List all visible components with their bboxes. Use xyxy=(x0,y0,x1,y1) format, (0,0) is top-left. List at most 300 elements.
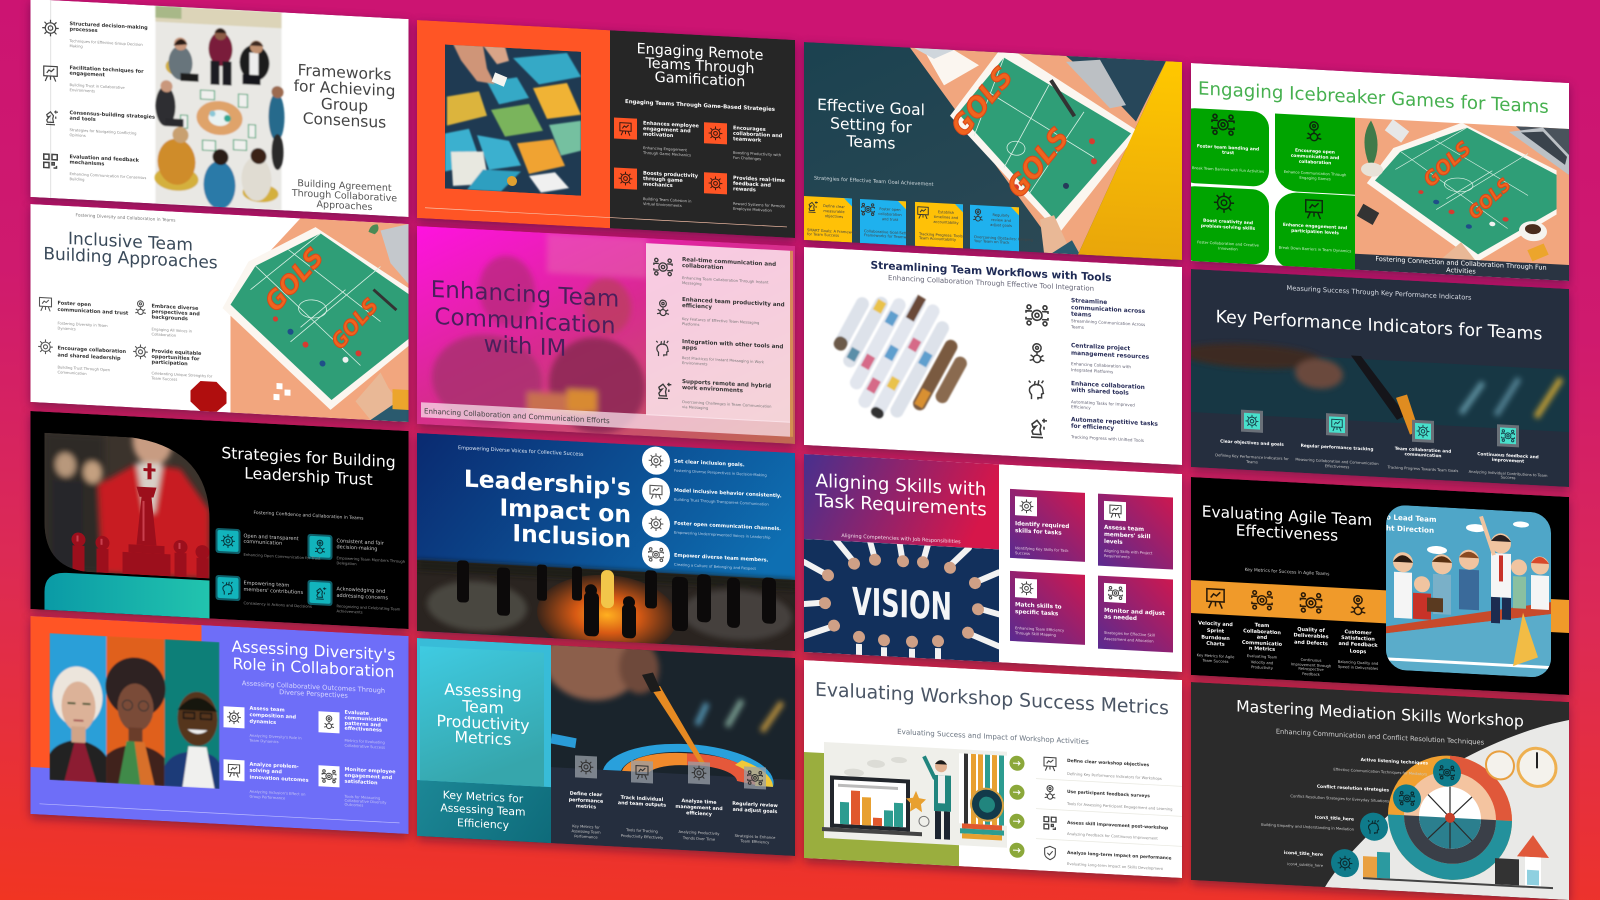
slide: Key Performance Indicators for Teams xyxy=(1181,268,1569,491)
step text: Define clear workshop objectives xyxy=(1067,758,1149,768)
tile icons xyxy=(619,121,722,191)
metric text: Balancing Quality and xyxy=(1338,660,1378,666)
panel text: Real-time communication and xyxy=(682,257,776,268)
gradient skill cards: Assess team xyxy=(1104,525,1144,533)
technique text: icon4_subtitle_here xyxy=(1287,862,1324,868)
tagline: Fostering Diversity and Collaboration in Teams xyxy=(75,212,176,224)
trust text: communication xyxy=(244,539,282,547)
metric text: Tools for Tracking xyxy=(625,828,658,834)
band icons xyxy=(1207,588,1365,616)
assessment text: Tools for Measuring xyxy=(344,795,380,801)
KPI labels xyxy=(1215,436,1548,482)
tool text xyxy=(1070,298,1158,444)
inclusion steps: Creating a Culture of Belonging and Respect xyxy=(674,563,757,571)
subtitle: Enhancing Collaboration Through Effective Tool Integration xyxy=(888,274,1094,293)
tool text: Tracking Progress with Unified Tools xyxy=(1070,434,1144,443)
metric text: Speed in Deliverables xyxy=(1338,665,1378,671)
teal corner shape xyxy=(44,572,210,618)
inclusion steps: Building Trust Through Transparent Communication xyxy=(674,498,769,507)
assessment text: communication xyxy=(344,715,388,723)
metric text: and Feedback xyxy=(1338,641,1378,649)
assessment text xyxy=(249,705,396,809)
item text: Celebrating Unique Strengths for xyxy=(152,371,213,379)
metric text: Loops xyxy=(1350,648,1366,655)
list text xyxy=(69,21,155,186)
green activity panels: Enhance Communication Through xyxy=(1284,170,1347,177)
title: Assessing xyxy=(444,679,522,703)
title: Engaging Remote xyxy=(637,41,764,64)
item text: Communication xyxy=(57,370,87,376)
list text: Structured decision-making xyxy=(70,21,148,31)
inclusion steps: Set clear inclusion goals. xyxy=(674,459,745,468)
gradient skill cards: members' skill xyxy=(1104,532,1151,540)
metric text: Retrospective xyxy=(1298,667,1324,672)
title: Inclusion xyxy=(512,519,631,553)
subtitle: Diverse Perspectives xyxy=(279,688,348,700)
subtitle: Enhancing Communication and Conflict Resolution Techniques xyxy=(1276,728,1485,747)
goals lettering: GOLS xyxy=(1419,137,1476,191)
goal cards: measurable xyxy=(823,209,845,214)
metric text: Communicatio xyxy=(1242,640,1283,648)
metric text: Key Metrics for xyxy=(572,824,600,830)
slide: Enhancing Team Communication with IM xyxy=(417,226,795,448)
slide: Evaluating Workshop Success Metrics xyxy=(804,660,1182,882)
right panel xyxy=(646,243,790,423)
inclusion steps: Fostering Diverse Perspectives in Decision-Making xyxy=(674,469,767,478)
subtitle: Aligning Competencies with Job Responsibilities xyxy=(841,533,961,545)
slide: Assessing Diversity's Role in Collaboration xyxy=(30,616,408,838)
title: Building Approaches xyxy=(43,244,218,273)
subtitle: Key Metrics for xyxy=(443,788,524,806)
trust text: Open and transparent xyxy=(244,533,299,542)
benefit text: Boosts productivity xyxy=(643,170,699,179)
item text: Embrace diverse xyxy=(152,303,199,312)
blurred meeting photo xyxy=(432,227,647,436)
goal cards: Overcoming Obstacles: Keeping xyxy=(974,235,1033,242)
assessment text: Metrics for Evaluating xyxy=(344,739,385,745)
panel text: Environments xyxy=(682,361,708,366)
green activity panels: Boost creativity and xyxy=(1203,218,1253,226)
metric text: and xyxy=(1257,634,1268,641)
trust text: Delegation xyxy=(336,561,357,566)
assessment text: Outcomes xyxy=(344,803,363,808)
metric text: Satisfaction xyxy=(1341,635,1375,643)
list text: mechanisms xyxy=(70,160,104,167)
KPI labels: communication xyxy=(1404,451,1442,459)
item text: and shared leadership xyxy=(57,352,121,362)
tool text: Automating Tasks for Improved xyxy=(1071,399,1135,408)
assessment text: solving and xyxy=(250,768,282,775)
assessment text: Assess team xyxy=(250,706,285,713)
title: Assessing Diversity's xyxy=(232,638,395,664)
subtitle: Through Collaborative xyxy=(291,188,397,204)
trust text: Recognizing and Celebrating Team xyxy=(336,604,401,612)
technique text: Building Empathy and Understanding in Mediation xyxy=(1261,823,1355,832)
item icons xyxy=(38,295,148,360)
tool text: Enhancing Collaboration with xyxy=(1071,361,1131,369)
assessment text: engagement and xyxy=(344,773,393,781)
assessment text: innovation outcomes xyxy=(250,775,309,784)
benefit text: Provides real-time xyxy=(733,175,786,184)
photo: goals field xyxy=(1355,117,1569,267)
goal cards: Frameworks for Teamwork xyxy=(864,233,913,240)
gradient skill cards: Aligning Skills with Project xyxy=(1104,549,1153,555)
panel text: Enhancing Team Collaboration Through Instant xyxy=(682,276,769,285)
metric text xyxy=(569,791,778,849)
technique text: Active listening techniques xyxy=(1361,757,1428,767)
panel icons xyxy=(654,258,672,399)
assessment text: Team Dynamics xyxy=(249,739,279,744)
panel text: Key Features of Effective Team Messaging xyxy=(682,317,759,325)
slide: Inclusive Team Building Approaches xyxy=(30,204,408,426)
tool text: communication across xyxy=(1071,305,1146,315)
tool text: Automate repetitive tasks xyxy=(1071,417,1158,428)
subtitle: Efficiency xyxy=(457,816,510,832)
KPI labels: Defining Key Performance Indicators for xyxy=(1215,453,1289,461)
title: Enhancing Team xyxy=(431,277,619,313)
benefit text: Virtual Environments xyxy=(643,202,682,208)
white icon tiles xyxy=(224,706,340,787)
benefit text: Fun Challenges xyxy=(733,156,761,161)
caption bar xyxy=(1355,254,1569,281)
slide: Engaging Icebreaker Games for Teams xyxy=(1179,62,1569,285)
item text: opportunities for xyxy=(152,354,200,362)
green activity panels: Engaging Games xyxy=(1299,176,1331,181)
item text: Encourage collaboration xyxy=(57,345,127,355)
KPI labels: Success xyxy=(1501,475,1515,480)
title: Consensus xyxy=(303,109,386,132)
step text: Analyze long-term impact on performance xyxy=(1067,850,1172,861)
slide: Frameworks for Achieving Group Consensus xyxy=(30,0,408,221)
photo: game board tiles xyxy=(445,43,581,196)
list text: Making xyxy=(70,44,83,49)
panel text: Best Practices for Instant Messaging in Work xyxy=(682,356,765,364)
KPI labels: Continuous feedback and xyxy=(1477,451,1539,460)
list text: Building Trust in Collaborative xyxy=(70,83,125,90)
title: with IM xyxy=(484,332,566,362)
KPI labels: Tracking Progress Towards Team Goals xyxy=(1387,465,1458,473)
assessment text: dynamics xyxy=(250,719,276,726)
green activity panels: communication and xyxy=(1291,153,1339,161)
VISION lettering: VISION xyxy=(852,580,952,629)
title: Streamlining Team Workflows with Tools xyxy=(870,260,1112,284)
trust text: Achievements xyxy=(336,609,363,615)
item text: backgrounds xyxy=(152,314,188,322)
goal cards: accountability xyxy=(933,220,960,225)
technique text: Effective Communication Techniques for Mediators xyxy=(1333,768,1427,777)
title: Effectiveness xyxy=(1236,521,1338,545)
slide: Evaluating Agile Team Effectiveness xyxy=(1191,477,1569,699)
slide: Aligning Skills with Task Requirements xyxy=(804,454,1182,676)
teal icon circles xyxy=(1331,752,1461,883)
title: Role in Collaboration xyxy=(233,655,394,681)
red octagon xyxy=(190,380,226,412)
list text: and tools xyxy=(70,116,96,123)
title: for Achieving xyxy=(294,77,395,100)
metric text: Improvement through xyxy=(1291,662,1332,668)
step text: Evaluating Long-term Impact on Skills Development xyxy=(1067,862,1164,871)
benefit text: through game xyxy=(643,176,683,184)
list text: Evaluation and feedback xyxy=(70,154,140,164)
teal icon tiles xyxy=(216,528,332,606)
benefit text: collaboration and xyxy=(733,131,783,139)
gradient skill cards: levels xyxy=(1104,539,1123,546)
portraits photo xyxy=(50,633,220,789)
goal cards: Collaborative Goal-Setting xyxy=(864,229,913,236)
goal cards: Team Accountability xyxy=(918,236,957,242)
panel text: Integration with other tools and xyxy=(682,339,783,350)
photo: goals field xyxy=(910,48,1166,259)
title: Group xyxy=(321,95,368,115)
gradient skill cards: as needed xyxy=(1104,614,1137,622)
item text: Foster open xyxy=(58,300,91,308)
step text: Defining Key Performance Indicators for Workshops xyxy=(1067,772,1162,781)
panel text: efficiency xyxy=(682,303,712,311)
KPI labels: Analyzing Individual Contributions to Team xyxy=(1469,470,1548,478)
green block xyxy=(804,752,959,866)
goal cards xyxy=(804,196,1033,252)
gauge illustration xyxy=(1363,739,1556,889)
KPI labels: Team collaboration and xyxy=(1395,446,1451,455)
gradient skill cards: Identify required xyxy=(1015,521,1069,530)
subtitle: Key Metrics for Success in Agile Teams xyxy=(1245,567,1330,577)
step text: Tools for Assessing Participant Engagement and Learning xyxy=(1066,802,1173,812)
metric text: Burndown xyxy=(1201,635,1230,642)
assessment text: Analyzing Diversity's Role in xyxy=(250,734,302,740)
assessment text: Collaborative Diversity xyxy=(344,799,387,805)
green activity panels xyxy=(1179,107,1355,272)
item text: Dynamics xyxy=(58,326,76,331)
benefit text: Building Team Cohesion in xyxy=(643,197,692,204)
title: Metrics xyxy=(455,727,511,749)
list text: Facilitation techniques for xyxy=(70,65,144,75)
item text: Engaging All Voices in xyxy=(152,327,193,334)
metric text: Trends Over Time xyxy=(682,836,716,842)
list text: Enhancing Communication for Consensus xyxy=(70,172,146,180)
inclusion steps: Empower diverse team members. xyxy=(674,553,769,564)
slide: Engaging Icebreaker Games for Teams: GOLS xyxy=(1465,175,1515,224)
trust text: decision-making xyxy=(336,544,377,552)
assessment text: Analyze problem- xyxy=(250,762,299,770)
benefit text: mechanics xyxy=(643,181,673,189)
photo: hand, pen and gauge xyxy=(544,622,795,788)
green activity panels: participation levels xyxy=(1291,228,1339,236)
tool text: Efficiency xyxy=(1071,404,1091,410)
goal cards: timelines and xyxy=(934,215,958,220)
metric text: Track individual xyxy=(621,795,664,803)
benefit text: Enhances employee xyxy=(643,120,699,129)
caption: Enhancing Collaboration and Communication Efforts xyxy=(424,406,610,425)
photo: goals field xyxy=(222,214,408,422)
goal cards: for Team Success xyxy=(807,232,839,238)
KPI labels: Measuring Collaboration and Communication xyxy=(1295,458,1379,466)
gradient skill cards: Assessment and Allocation xyxy=(1104,637,1154,644)
green activity panels: Break Team Barriers with Fun Activities xyxy=(1192,166,1264,174)
tagline: Empowering Diverse Voices for Collective Success xyxy=(458,445,584,458)
item text: perspectives and xyxy=(152,309,200,317)
goal cards: and trust xyxy=(882,217,899,222)
metric text: Productivity xyxy=(1251,665,1274,670)
technique text: Conflict resolution strategies xyxy=(1317,784,1389,794)
inclusion steps: Model inclusive behavior consistently. xyxy=(674,488,782,499)
slide: Strategies for Building Leadership Trust xyxy=(30,411,408,633)
subtitle: Building Agreement xyxy=(297,178,392,194)
subtitle: Approaches xyxy=(317,199,372,213)
slide: Assessing Team Productivity Metrics xyxy=(417,615,795,860)
trust text: Empowering team xyxy=(244,580,289,589)
KPI labels: Regular performance tracking xyxy=(1301,443,1373,453)
subtitle: Fostering Confidence and Collaboration in Teams xyxy=(253,510,364,522)
title: Frameworks xyxy=(298,61,391,84)
technique text xyxy=(1261,752,1428,874)
metric text: performance xyxy=(569,797,604,805)
title: Engaging Icebreaker Games for Teams xyxy=(1198,78,1549,118)
gradient skill cards: Requirements xyxy=(1104,554,1130,559)
tool text: with shared tools xyxy=(1071,388,1129,397)
gradient skill cards: skills for tasks xyxy=(1015,528,1062,537)
tool text: Teams xyxy=(1070,324,1084,330)
goal cards: SMART Goals: A Framework xyxy=(807,228,858,235)
goal cards: Your Team on Track xyxy=(974,239,1010,245)
goal cards: Define clear xyxy=(823,204,845,209)
metric text: Assessing Team xyxy=(571,829,601,835)
goal cards: review and xyxy=(991,218,1011,223)
green activity panels: problem-solving skills xyxy=(1201,223,1256,232)
green activity panels: Foster Collaboration and Creative xyxy=(1197,240,1260,248)
green activity panels: trust xyxy=(1222,150,1234,156)
assessment text: Evaluate xyxy=(344,710,370,717)
photo: hand and pen xyxy=(1181,340,1569,443)
metric text: Team Success xyxy=(1202,659,1228,664)
panel text: via Messaging xyxy=(682,405,708,410)
metric text: efficiency xyxy=(686,810,713,818)
gradient skill cards: Identifying Key Skills for Task xyxy=(1015,546,1069,553)
trust text: addressing concerns xyxy=(336,593,388,601)
image: diagonal strips xyxy=(813,266,984,448)
assessment text: effectiveness xyxy=(344,726,382,734)
benefit text: Encourages xyxy=(733,125,766,133)
title: Team xyxy=(461,696,504,718)
panel text: Platforms xyxy=(682,322,700,327)
subtitle: Assessing Collaborative Outcomes Through xyxy=(242,679,385,695)
green arrow bullets xyxy=(1010,755,1024,858)
green activity panels: Break Down Barriers in Team Dynamics xyxy=(1279,246,1351,254)
left teal panel xyxy=(417,638,551,843)
item text: communication and trust xyxy=(58,307,129,317)
orange band xyxy=(1191,580,1569,633)
step text: Assess skill improvement post-workshop xyxy=(1067,820,1168,831)
metric text: Key Metrics for Agile xyxy=(1197,653,1235,659)
tool text: Centralize project xyxy=(1071,343,1130,352)
green activity panels: collaboration xyxy=(1299,159,1331,166)
gray icon tiles xyxy=(575,755,766,789)
trust text: Consistent and fair xyxy=(336,538,385,547)
title: Productivity xyxy=(436,711,530,735)
goal cards: Regularly xyxy=(993,213,1010,218)
item text: Building Trust Through Open xyxy=(57,365,111,372)
list text: engagement xyxy=(70,71,106,78)
title: Communication xyxy=(434,304,616,340)
subtitle: Engaging Teams Through Game-Based Strategies xyxy=(625,99,775,113)
white icon circles xyxy=(642,446,670,569)
tool text: Enhance collaboration xyxy=(1071,381,1145,391)
gradient skill cards: Strategies for Effective Skill xyxy=(1104,631,1155,638)
inclusion steps xyxy=(674,459,782,572)
metric text: Productivity Effectively xyxy=(621,834,664,840)
metric text: Regularly review xyxy=(732,801,778,809)
benefit text: engagement and xyxy=(643,126,691,135)
light curved area xyxy=(1325,707,1569,900)
step icons xyxy=(1044,757,1056,860)
assessment text: composition and xyxy=(250,712,297,721)
tagline: Measuring Success Through Key Performance Indicators xyxy=(1287,284,1472,302)
slide: Streamlining Team Workflows with Tools xyxy=(804,247,1182,469)
title: Evaluating Workshop Success Metrics xyxy=(815,680,1169,719)
list text: Strategies for Navigating Conflicting xyxy=(70,128,137,136)
gradient header xyxy=(804,454,999,549)
tool text: management resources xyxy=(1071,351,1150,361)
bottom caption bar xyxy=(421,402,790,437)
title: Teams xyxy=(845,132,896,153)
title: Leadership Trust xyxy=(244,464,373,489)
metric text: Evaluating Team xyxy=(1247,654,1278,660)
orange icon tiles xyxy=(614,117,727,194)
list text: Techniques for Effective Group Decision xyxy=(69,39,143,47)
panel text: collaboration xyxy=(682,263,724,271)
benefit text: rewards xyxy=(733,186,756,193)
tool text: Integrated Platforms xyxy=(1071,367,1113,374)
list text: processes xyxy=(70,27,98,34)
item text: Fostering Diversity in Team xyxy=(58,321,108,328)
title: Aligning Skills with xyxy=(816,471,986,501)
metric text: Team xyxy=(1255,622,1269,629)
photo: team sitting in a circle xyxy=(154,6,284,212)
technique text: icon3_title_here xyxy=(1315,815,1354,823)
metric text: Quality of xyxy=(1297,627,1326,634)
gradient skill cards: Match skills to xyxy=(1015,602,1062,611)
green activity panels: Enhance engagement and xyxy=(1283,222,1347,231)
metric text: Analyze time xyxy=(681,798,717,806)
title: Leadership's xyxy=(464,465,631,501)
gradient skill cards: Success xyxy=(1015,551,1030,556)
step text xyxy=(1066,758,1173,872)
metric text: Define clear xyxy=(570,791,603,798)
icon list xyxy=(42,19,59,168)
assessment text: patterns and xyxy=(344,721,381,729)
goal cards: collaboration xyxy=(878,212,902,217)
title: Evaluating Agile Team xyxy=(1202,503,1372,530)
metric text: Continuous xyxy=(1301,658,1321,663)
title: Inclusive Team xyxy=(68,229,193,256)
goal cards: Establish xyxy=(938,210,954,215)
assessment text: Monitor employee xyxy=(344,767,396,775)
title: Gamification xyxy=(655,70,745,90)
goal cards: Foster open xyxy=(879,207,901,212)
yellow wedge xyxy=(1078,57,1182,260)
metric text: management and xyxy=(675,804,723,812)
metric text: Team Efficiency xyxy=(740,839,770,845)
panel text: work environments xyxy=(682,385,744,394)
slide: Engaging Remote Teams Through Gamification xyxy=(417,20,795,242)
metric text: Sprint xyxy=(1207,628,1225,635)
slide: Inclusive Team Building Approaches: GOLS xyxy=(326,293,383,354)
list text: Environments xyxy=(70,88,95,93)
tool text: Streamlining Communication Across xyxy=(1071,318,1145,327)
gradient skill cards: specific tasks xyxy=(1015,609,1059,618)
panel text: Supports remote and hybrid xyxy=(682,379,771,390)
illustration: team on a boat: o Lead Team xyxy=(1386,512,1437,524)
title: Effective Goal xyxy=(817,96,925,119)
